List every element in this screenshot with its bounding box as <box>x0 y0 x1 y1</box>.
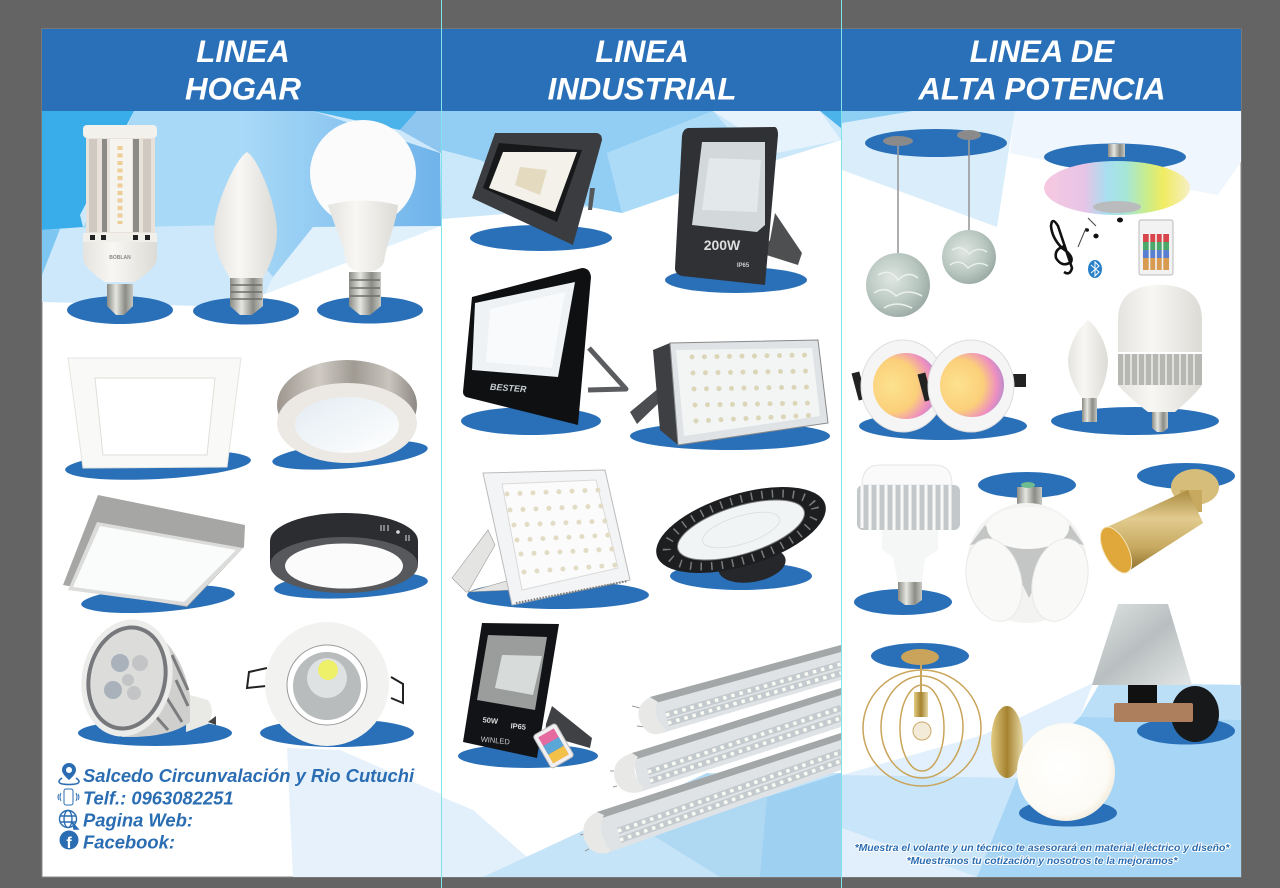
product: LED tube 3 <box>580 733 841 853</box>
product: gold wall globe <box>991 706 1117 826</box>
panel: linea de alta potencia <box>852 129 1235 867</box>
icon: remote control <box>533 723 574 769</box>
heading: linea industrial: LINEA <box>595 34 689 69</box>
product: RGB downlights <box>852 340 1027 440</box>
product: Bester black floodlight <box>461 268 626 435</box>
text: phone number: Telf.: 0963082251 <box>83 788 234 808</box>
footer note <box>855 843 1230 867</box>
product: marble shade wall lamp <box>1092 604 1235 744</box>
contact block <box>58 763 415 852</box>
product: MR16 spotlight <box>71 611 232 746</box>
product: 50W RGB floodlight with remote: WINLED <box>480 735 511 747</box>
header band <box>42 29 1241 111</box>
icon: facebook: f <box>66 835 72 852</box>
background shapes: hogar <box>42 111 441 877</box>
footer note: *Muestranos tu cotización y nosotros te la mejoramos* <box>907 856 1178 867</box>
background shapes: alta potencia <box>842 111 1241 877</box>
product: gold ring pendant <box>863 643 981 786</box>
icon: globe <box>60 810 78 829</box>
product: foldable three-blade bulb <box>958 472 1096 627</box>
heading: linea de alta potencia: ALTA POTENCIA <box>917 72 1166 106</box>
product: round black ceiling light <box>270 513 429 602</box>
product: square silver ceiling light <box>63 495 245 617</box>
product: LED tube 2 <box>610 688 841 793</box>
product: high bay bulb <box>854 465 960 615</box>
product: candle and T bulbs <box>1051 285 1219 435</box>
icon: rgb remote <box>1139 220 1173 275</box>
panel: linea industrial <box>452 127 841 853</box>
product: Bester black floodlight: BESTER <box>490 382 527 394</box>
product: RGB bluetooth UFO lamp <box>1044 144 1190 222</box>
icon: bluetooth <box>1088 260 1102 278</box>
product: UFO high bay <box>646 470 836 590</box>
product: round COB downlight <box>247 622 414 747</box>
product: 50W RGB floodlight with remote <box>458 623 598 769</box>
icon: location pin <box>59 763 79 784</box>
heading: linea hogar: LINEA <box>196 34 290 69</box>
footer note: *Muestra el volante y un técnico te asesorará en material eléctrico y diseño* <box>855 843 1230 854</box>
product: black floodlight 200W <box>665 127 807 293</box>
product: black floodlight small LED <box>470 133 612 251</box>
icon: phone <box>58 789 79 805</box>
product: gold spotlight <box>1094 463 1235 578</box>
panel: linea hogar <box>58 120 429 852</box>
text: address: Salcedo Circunvalación y Rio Cutuchi <box>83 765 415 786</box>
product: A-shape bulb <box>310 120 423 324</box>
product: 50W RGB floodlight with remote: 50W <box>482 715 499 726</box>
product: LED tube 1 <box>632 645 841 734</box>
icon: music notes <box>1051 218 1099 273</box>
product: black floodlight 200W: IP65 <box>737 263 750 269</box>
product: 50W RGB floodlight with remote: IP65 <box>510 721 526 732</box>
product: candle bulb <box>193 152 299 324</box>
product: black floodlight 200W: 200W <box>704 237 741 253</box>
product: white floodlight <box>452 470 649 609</box>
text: website: Pagina Web: <box>83 810 193 830</box>
product: linear LED module <box>630 340 830 450</box>
background shapes: industrial <box>442 111 841 877</box>
text: facebook: Facebook: <box>83 832 175 852</box>
icon: facebook <box>60 830 78 852</box>
heading: linea industrial: INDUSTRIAL <box>548 72 736 106</box>
product: glass globe pendants <box>865 129 1007 317</box>
product: round silver ceiling light <box>271 360 429 475</box>
product: corn bulb: BOBLAN <box>109 255 131 261</box>
heading: linea de alta potencia: LINEA DE <box>970 34 1115 69</box>
product: corn bulb <box>67 125 173 324</box>
product: square flush panel <box>64 358 252 484</box>
heading: linea hogar: HOGAR <box>185 72 302 106</box>
